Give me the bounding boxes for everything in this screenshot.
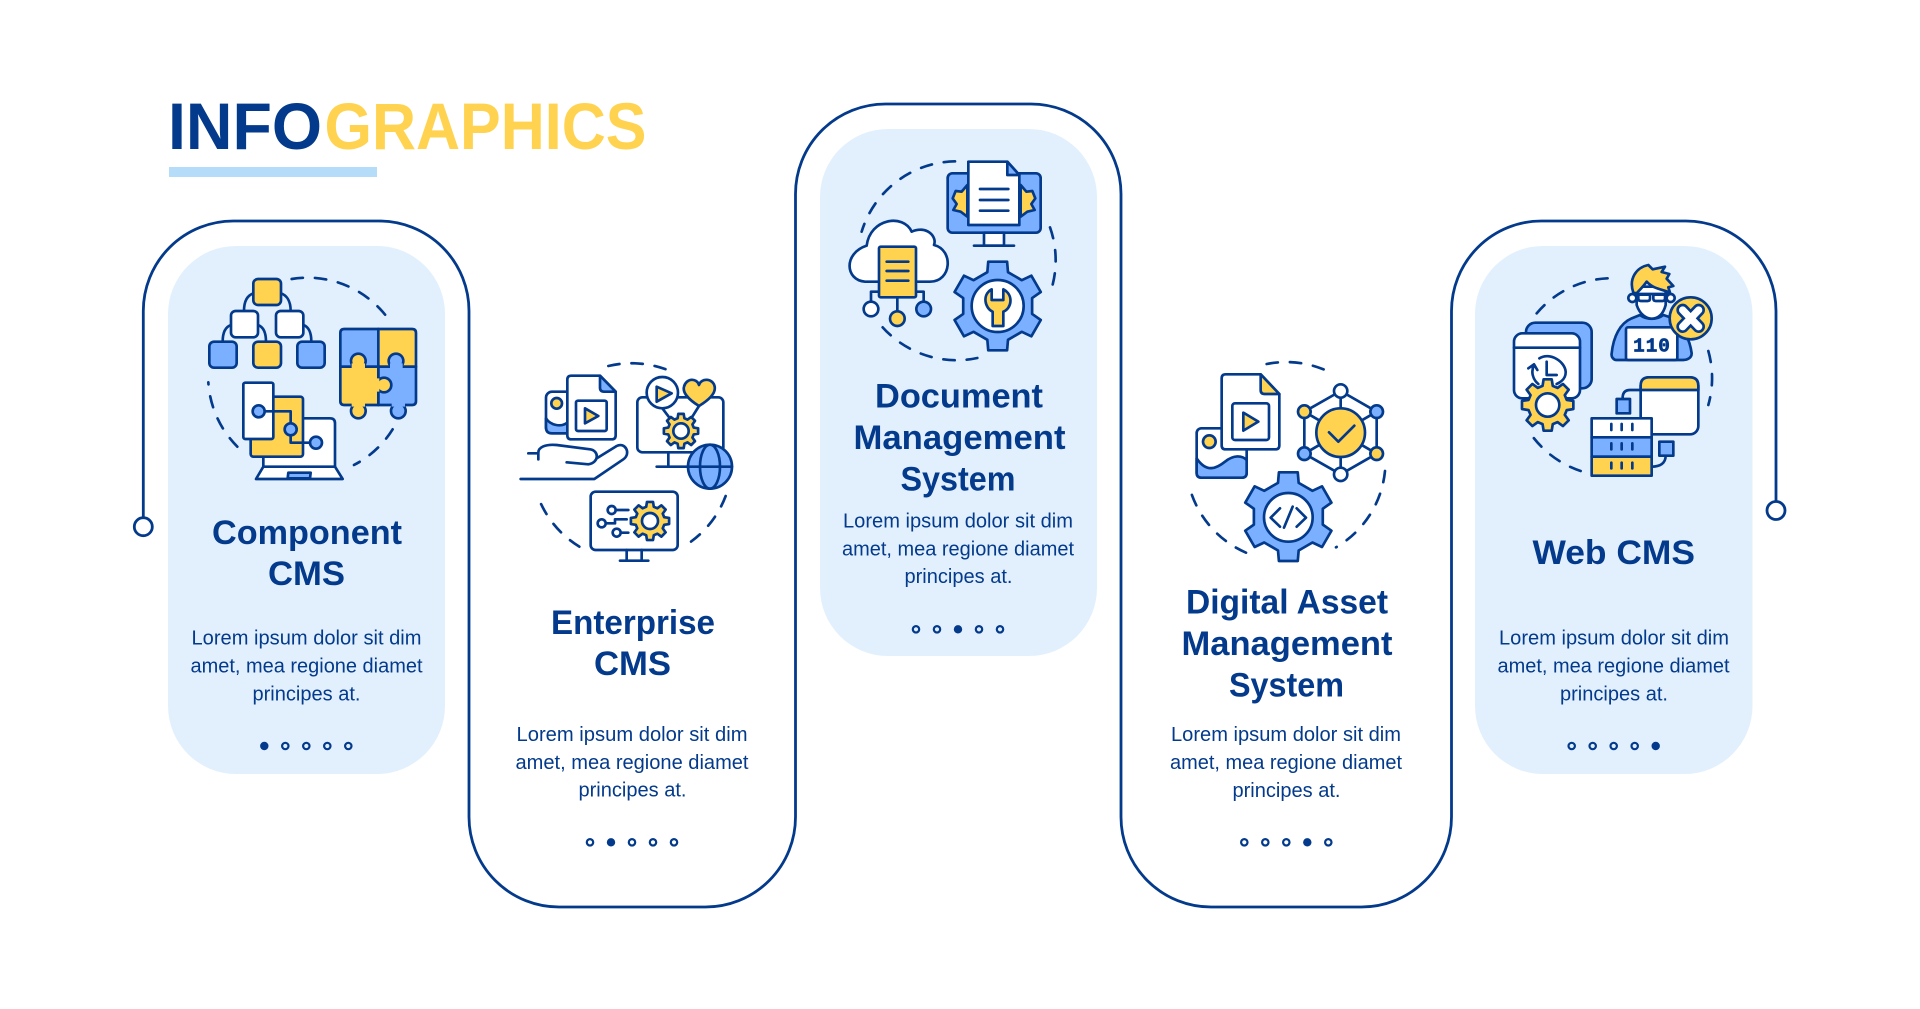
heading: Document Management System: Document (875, 378, 1043, 416)
connecting outline around all five panels (134, 104, 1785, 907)
body text: Lorem ipsum dolor sit dim (1171, 724, 1401, 746)
body text (1170, 724, 1402, 802)
title: INFOGRAPHICS (168, 90, 646, 163)
body text: Lorem ipsum dolor sit dim (192, 628, 422, 650)
panel: Enterprise CMS (516, 363, 749, 846)
heading: Component CMS (212, 514, 403, 593)
heading: Enterprise CMS: CMS (594, 645, 671, 683)
title underline (169, 167, 377, 177)
panel: Document Management System (842, 161, 1074, 634)
icon: developer, browser windows, gear and server (1514, 265, 1712, 476)
icon: media in hand, monitors, gears and globe (521, 363, 732, 561)
icon: developer, browser windows, gear and server: 110 (1633, 336, 1671, 358)
body text: Lorem ipsum dolor sit dim (1499, 628, 1729, 650)
body text: principes at. (578, 780, 686, 802)
panel: Web CMS (1498, 265, 1730, 750)
heading: Enterprise CMS (551, 604, 715, 683)
icon: document monitor, cloud server and wrench gear (850, 161, 1056, 360)
heading: Document Management System: Management (854, 419, 1066, 457)
body text: Lorem ipsum dolor sit dim (843, 510, 1073, 532)
light card: Component CMS (168, 246, 445, 774)
body text: amet, mea regione diamet (842, 538, 1074, 560)
icon: media file, network check and code gear (1190, 362, 1385, 561)
body text: principes at. (252, 684, 360, 706)
panel: Component CMS (190, 278, 423, 750)
light card: Web CMS (1475, 246, 1752, 774)
body text: amet, mea regione diamet (1170, 752, 1402, 774)
heading: Enterprise CMS: Enterprise (551, 604, 715, 642)
body text: principes at. (904, 566, 1012, 588)
body text (842, 510, 1074, 588)
body text (1498, 628, 1730, 706)
heading: Digital Asset Management System: Digital Asset (1186, 584, 1388, 622)
body text (516, 724, 749, 802)
body text: amet, mea regione diamet (1498, 656, 1730, 678)
pagination dots (1568, 742, 1660, 750)
pagination dots (260, 742, 351, 750)
body text: amet, mea regione diamet (516, 752, 749, 774)
heading: Document Management System: System (900, 460, 1016, 498)
title: INFOGRAPHICS: INFO (168, 90, 322, 163)
body text: amet, mea regione diamet (190, 656, 423, 678)
pagination dots (913, 625, 1003, 634)
heading: Digital Asset Management System: System (1229, 666, 1344, 704)
pagination dots (1241, 838, 1332, 846)
heading: Component CMS: Component (212, 514, 403, 552)
heading: Digital Asset Management System (1182, 584, 1393, 704)
heading: Web CMS: Web CMS (1532, 534, 1695, 572)
body text: Lorem ipsum dolor sit dim (516, 724, 748, 746)
heading: Digital Asset Management System: Management (1182, 625, 1393, 663)
body text: principes at. (1560, 684, 1668, 706)
body text (190, 628, 423, 706)
heading: Component CMS: CMS (268, 555, 345, 593)
icon: hierarchy, puzzle and laptop components (208, 278, 416, 479)
pagination dots (587, 838, 677, 846)
heading: Document Management System (854, 378, 1066, 498)
body text: principes at. (1232, 780, 1340, 802)
panel: Digital Asset Management System (1170, 362, 1402, 846)
light card: Document Management System (820, 129, 1097, 656)
title: INFOGRAPHICS: GRAPHICS (324, 90, 646, 163)
